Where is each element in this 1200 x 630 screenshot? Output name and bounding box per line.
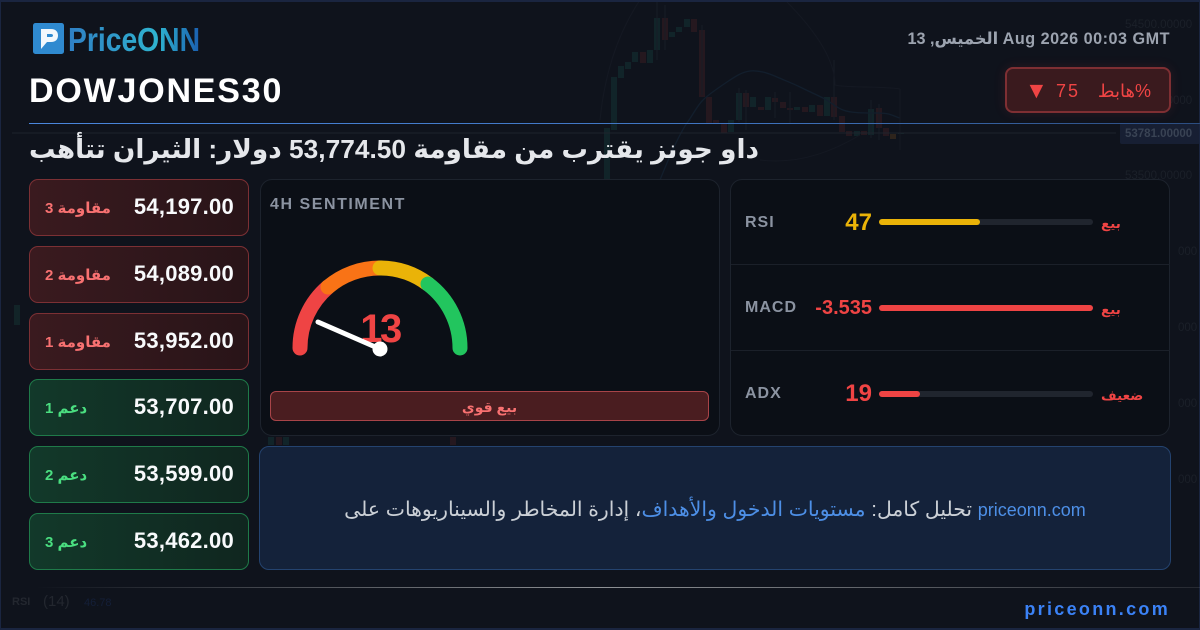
support 2	[29, 446, 249, 503]
resistance 1: مقاومة 1	[45, 334, 111, 351]
support 3	[29, 513, 249, 570]
indicator: ADX: ضعيف	[1101, 388, 1143, 403]
indicator: MACD: -3.535	[815, 297, 872, 319]
indicator: MACD: بيع	[1101, 302, 1121, 317]
ticker heading: DOWJONES30	[29, 72, 283, 110]
support 3: دعم 3	[45, 534, 87, 551]
support 1: دعم 1	[45, 400, 87, 417]
faint background chart: 53781.00000	[1125, 128, 1192, 140]
indicator: ADX	[745, 380, 1143, 407]
resistance 3	[29, 179, 249, 236]
support 2: دعم 2	[45, 467, 87, 484]
indicator: RSI: بيع	[1101, 216, 1121, 231]
gauge: 13	[360, 307, 401, 351]
panel: call to action	[259, 446, 1171, 570]
faint background chart: 000	[1178, 398, 1197, 410]
faint background chart: 54500.00000	[1125, 19, 1192, 31]
header rule	[29, 123, 1200, 124]
support 1: 53,707.00	[134, 394, 234, 419]
indicator: MACD: MACD	[745, 299, 797, 316]
resistance 3: مقاومة 3	[45, 200, 111, 217]
resistance 2: 54,089.00	[134, 261, 234, 286]
resistance 2: مقاومة 2	[45, 267, 111, 284]
headline: داو جونز يقترب من مقاومة 53,774.50 دولار: الثيران تتأهب	[29, 134, 759, 164]
gauge	[292, 260, 468, 356]
signal pill	[270, 391, 709, 421]
support 2: 53,599.00	[134, 461, 234, 486]
trend badge: ▼	[1025, 77, 1048, 103]
faint background chart: RSI	[12, 596, 30, 608]
resistance 2	[29, 246, 249, 303]
support 1	[29, 379, 249, 436]
indicator: ADX: ADX	[745, 385, 782, 402]
faint background chart: 000	[1178, 474, 1197, 486]
date: الخميس, 13 Aug 2026 00:03 GMT	[908, 30, 1170, 48]
indicator: ADX: 19	[845, 380, 872, 407]
trend badge	[1005, 67, 1171, 113]
footer url: priceonn.com	[1024, 599, 1170, 619]
indicator: MACD	[731, 265, 1170, 351]
trend badge: %هابط	[1098, 81, 1151, 101]
faint background chart: 53500.00000	[1125, 170, 1192, 182]
indicator: RSI: RSI	[745, 214, 775, 231]
trend badge: 75	[1056, 81, 1080, 101]
support 3: 53,462.00	[134, 528, 234, 553]
resistance 1	[29, 313, 249, 370]
footer rule	[0, 587, 1200, 588]
faint background chart: 000	[1178, 246, 1197, 258]
faint background chart: 46.78	[84, 597, 112, 609]
panel: indicators	[730, 179, 1170, 436]
faint background chart: 000	[1178, 322, 1197, 334]
faint background chart: (14)	[43, 593, 70, 610]
indicator: RSI	[731, 180, 1170, 265]
signal pill: بيع قوي	[462, 399, 517, 415]
indicator: RSI: 47	[845, 209, 872, 236]
resistance 1: 53,952.00	[134, 328, 234, 353]
panel: sentiment	[260, 179, 720, 436]
sentiment heading: 4H SENTIMENT	[270, 196, 406, 213]
call to action text: تحليل كامل: مستويات الدخول والأهداف، إدارة المخاطر والسيناريوهات على priceonn.com	[344, 499, 1086, 521]
faint background chart: 54000.00000	[1125, 95, 1192, 107]
resistance 3: 54,197.00	[134, 194, 234, 219]
